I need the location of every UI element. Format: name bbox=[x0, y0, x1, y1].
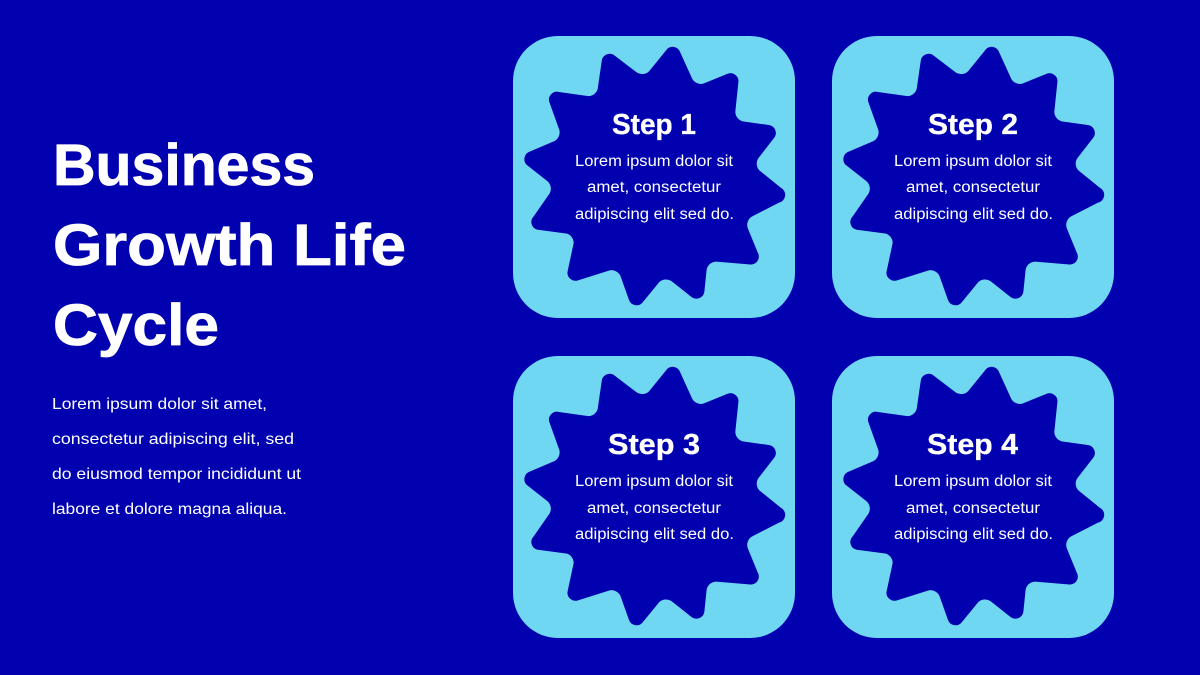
panel: step 3 bbox=[513, 356, 795, 638]
intro text block: Lorem ipsum dolor sit amet, bbox=[52, 396, 267, 413]
text: step 4 description bbox=[894, 473, 1053, 543]
text: step 2 description: amet, consectetur bbox=[906, 179, 1040, 196]
text: step 1 description: amet, consectetur bbox=[587, 179, 721, 196]
text: step 3 description bbox=[575, 473, 734, 543]
icon: starburst 1 bbox=[524, 47, 785, 305]
icon: starburst 2 bbox=[843, 47, 1104, 305]
text: step 2 description bbox=[894, 153, 1053, 223]
text: step 1 description: Lorem ipsum dolor sit bbox=[575, 153, 734, 170]
text: step 4 description: Lorem ipsum dolor sit bbox=[894, 473, 1053, 490]
title: Cycle bbox=[53, 293, 219, 358]
text: step 1 description: adipiscing elit sed do. bbox=[575, 206, 734, 223]
heading: step 3: Step 3 bbox=[608, 429, 700, 461]
icon: starburst 3 bbox=[524, 367, 785, 625]
text: step 3 description: Lorem ipsum dolor sit bbox=[575, 473, 734, 490]
heading: step 2: Step 2 bbox=[928, 109, 1018, 141]
text: step 2 description: Lorem ipsum dolor sit bbox=[894, 153, 1053, 170]
intro text block: labore et dolore magna aliqua. bbox=[52, 501, 287, 518]
title bbox=[53, 133, 406, 358]
text: step 4 description: adipiscing elit sed do. bbox=[894, 526, 1053, 543]
panel: step 1 bbox=[513, 36, 795, 318]
heading: step 1: Step 1 bbox=[612, 109, 696, 141]
intro text block bbox=[52, 396, 302, 518]
text: step 2 description: adipiscing elit sed do. bbox=[894, 206, 1053, 223]
text: step 3 description: amet, consectetur bbox=[587, 500, 721, 517]
intro text block: do eiusmod tempor incididunt ut bbox=[52, 466, 302, 483]
title: Growth Life bbox=[53, 213, 406, 278]
title: Business bbox=[53, 133, 315, 198]
panel: step 4 bbox=[832, 356, 1114, 638]
intro text block: consectetur adipiscing elit, sed bbox=[52, 431, 294, 448]
heading: step 4: Step 4 bbox=[927, 429, 1018, 461]
icon: starburst 4 bbox=[843, 367, 1104, 625]
text: step 1 description bbox=[575, 153, 734, 223]
text: step 4 description: amet, consectetur bbox=[906, 500, 1040, 517]
panel: step 2 bbox=[832, 36, 1114, 318]
text: step 3 description: adipiscing elit sed do. bbox=[575, 526, 734, 543]
